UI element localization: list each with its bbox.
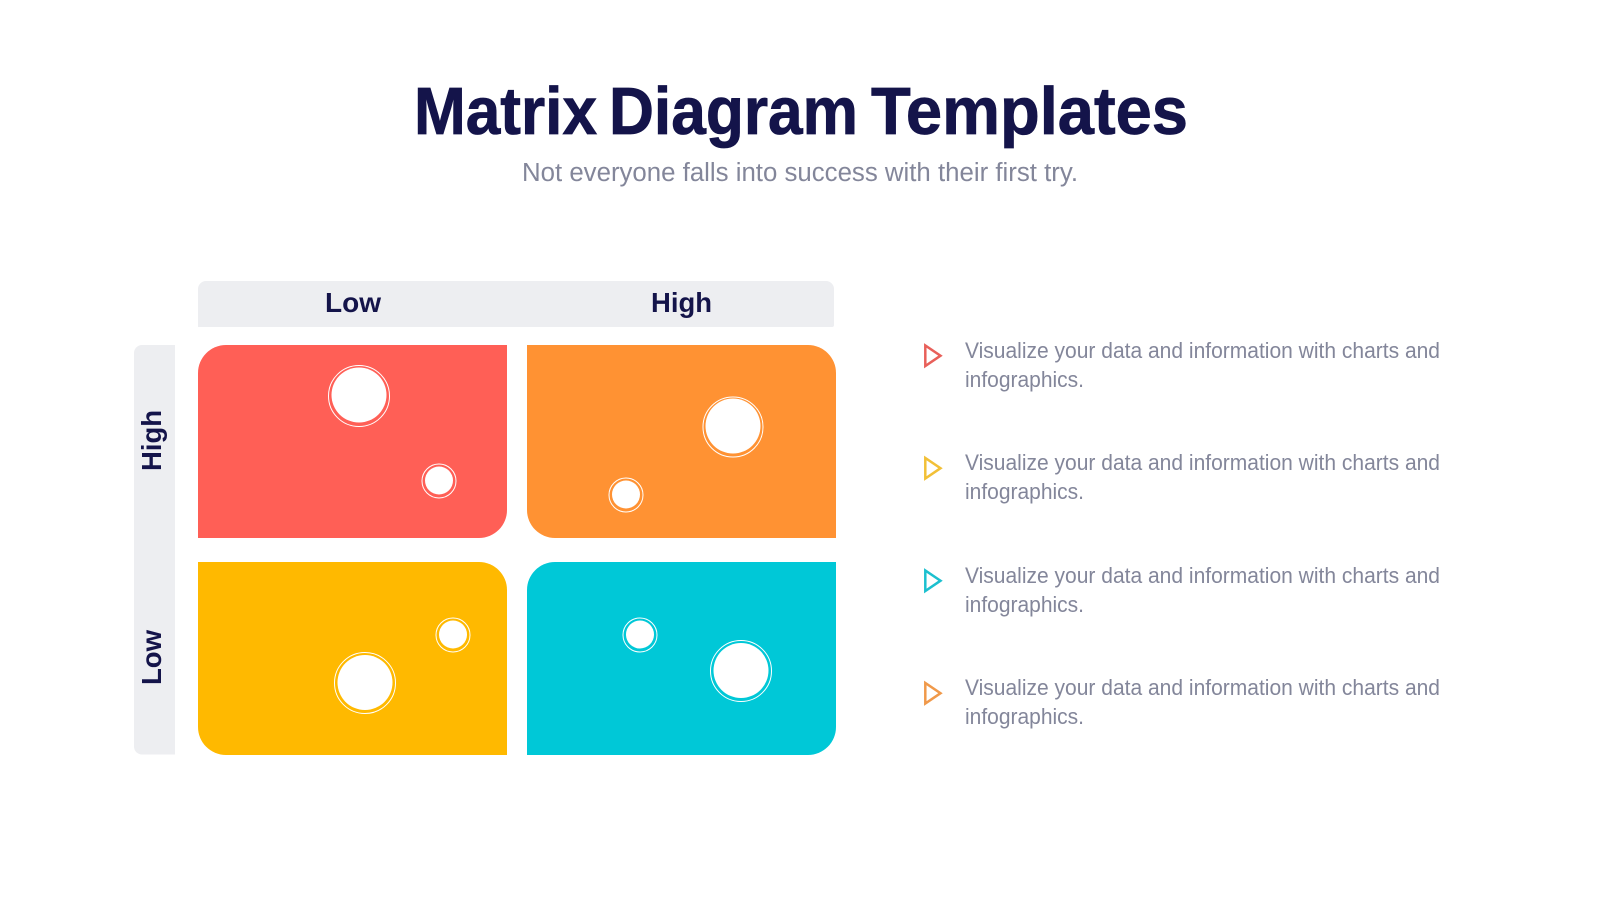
text block 3	[965, 563, 1440, 617]
list item 3	[925, 563, 1440, 617]
list item 2	[925, 450, 1440, 504]
title: Templates	[871, 74, 1188, 149]
row header bar	[134, 345, 175, 754]
quadrant: high low red	[198, 345, 507, 538]
text block 3: Visualize your data and information with charts and	[965, 563, 1440, 588]
quadrant: high high orange	[527, 345, 836, 538]
bubble: large	[328, 366, 390, 426]
bubble: small	[609, 478, 643, 512]
bubble: small	[422, 464, 456, 498]
text block 4: Visualize your data and information with charts and	[965, 675, 1440, 700]
title: Diagram	[609, 74, 858, 149]
subtitle: Not everyone falls into success with their first try.	[522, 159, 1078, 187]
column label: high: High	[651, 287, 712, 318]
column label: low: Low	[325, 287, 381, 318]
title	[414, 74, 1188, 149]
row label: high: High	[136, 410, 167, 471]
bubble: large	[334, 652, 396, 714]
bubble: small	[623, 618, 657, 652]
panel: matrix diagram	[134, 281, 836, 755]
quadrant: low high teal	[527, 562, 836, 755]
list item 1	[925, 338, 1440, 392]
bubble: large	[703, 397, 763, 457]
text block 1: infographics.	[965, 367, 1084, 392]
panel: text list	[925, 338, 1440, 729]
icon: teal triangle arrow	[925, 570, 940, 591]
text block 3: infographics.	[965, 592, 1084, 617]
icon: orange triangle arrow	[925, 683, 940, 704]
bubble: large	[710, 640, 772, 702]
quadrant: low low yellow	[198, 562, 507, 755]
title: Matrix	[414, 74, 597, 149]
text block 2	[965, 450, 1440, 504]
icon: yellow triangle arrow	[925, 458, 940, 478]
text block 4	[965, 675, 1440, 729]
bubble: small	[436, 618, 470, 652]
text block 1	[965, 338, 1440, 392]
row label: low: Low	[136, 630, 167, 685]
text block 1: Visualize your data and information with charts and	[965, 338, 1440, 363]
column header bar	[198, 281, 834, 327]
icon: red triangle arrow	[925, 346, 940, 366]
text block 2: Visualize your data and information with charts and	[965, 450, 1440, 475]
text block 2: infographics.	[965, 479, 1084, 504]
list item 4	[925, 675, 1440, 729]
text block 4: infographics.	[965, 704, 1084, 729]
